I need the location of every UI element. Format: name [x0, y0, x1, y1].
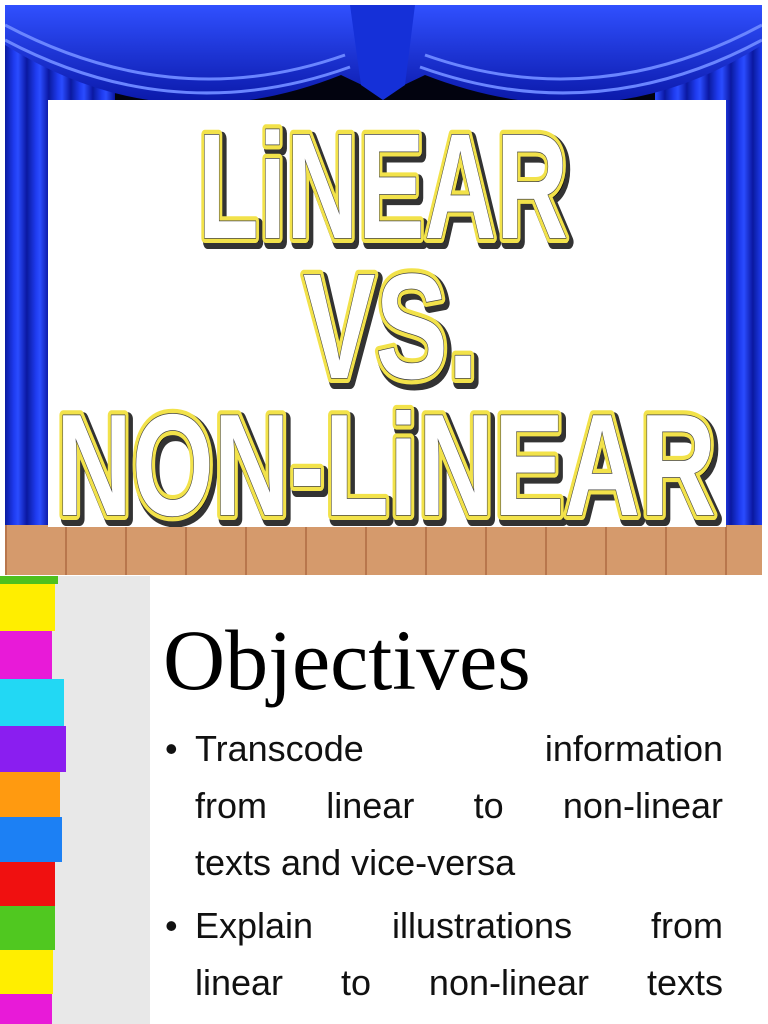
title: VS.: VS. [303, 242, 478, 410]
board with title [48, 100, 726, 527]
stage image [5, 5, 762, 575]
bullet 1: texts and vice-versa [195, 842, 515, 883]
bullet 1: Transcode information [195, 728, 723, 769]
bullet 2: Explain illustrations from [195, 905, 723, 946]
bullet 1: • [165, 728, 178, 769]
title: VS.: VS. [306, 246, 481, 414]
bullet 1: from linear to non-linear [195, 785, 723, 826]
curtains [5, 5, 762, 535]
valance [5, 5, 762, 100]
floor [5, 525, 762, 575]
title: LINEAR [198, 102, 571, 274]
title: VS.: VS. [303, 242, 478, 410]
bullet 2: linear to non-linear texts [195, 962, 723, 1003]
bullet 2: • [165, 905, 178, 946]
book stack [0, 576, 150, 1024]
bullet 1 [165, 728, 723, 883]
heading: Objectives: Objectives [163, 612, 531, 708]
bullet 2 [165, 905, 723, 1024]
